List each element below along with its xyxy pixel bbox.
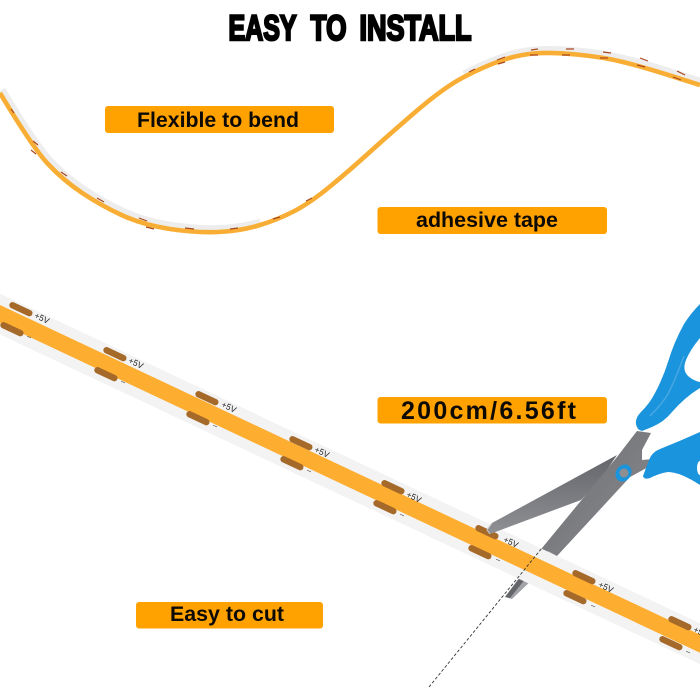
handle highlight bbox=[650, 356, 684, 416]
lower blue handle bbox=[643, 432, 700, 485]
positive voltage labels: +5V bbox=[597, 579, 615, 595]
positive voltage labels: +5V bbox=[127, 355, 145, 371]
curved LED strip bbox=[0, 49, 700, 232]
top solder pads bbox=[8, 301, 693, 631]
scissors main blade bbox=[542, 431, 653, 556]
scissors blade over strip bbox=[487, 455, 617, 534]
negative labels: − bbox=[304, 465, 314, 477]
upper blue handle bbox=[636, 304, 700, 431]
title bbox=[228, 8, 472, 48]
straight LED strip bbox=[0, 301, 700, 658]
label: flexible to bend: Flexible to bend bbox=[137, 108, 299, 132]
title: TO bbox=[310, 8, 346, 48]
positive voltage labels: +5V bbox=[33, 310, 51, 326]
negative labels bbox=[24, 331, 693, 658]
handle opening bbox=[697, 461, 700, 475]
title: EASY bbox=[228, 8, 297, 48]
negative labels: − bbox=[588, 600, 598, 612]
positive voltage labels: +5V bbox=[220, 399, 238, 415]
positive voltage labels bbox=[33, 310, 700, 640]
positive voltage labels: +5V bbox=[405, 489, 423, 505]
label: adhesive tape bbox=[378, 207, 607, 234]
label: length: 200cm/6.56ft bbox=[401, 397, 577, 425]
bottom solder pads bbox=[0, 321, 684, 651]
label: flexible to bend bbox=[105, 106, 334, 133]
negative labels: − bbox=[397, 509, 407, 521]
dashed cut line bbox=[429, 548, 542, 687]
scissors pivot bbox=[612, 461, 635, 485]
scissors upper part bbox=[487, 304, 700, 556]
title: INSTALL bbox=[360, 8, 472, 48]
positive voltage labels: +5V bbox=[313, 444, 331, 460]
label: adhesive tape: adhesive tape bbox=[416, 208, 558, 232]
negative labels: − bbox=[118, 376, 128, 388]
label: easy to cut bbox=[136, 602, 323, 628]
scissors lower blade tip behind strip bbox=[505, 548, 557, 599]
negative labels: − bbox=[210, 420, 220, 432]
label: easy to cut: Easy to cut bbox=[170, 602, 284, 626]
negative labels: − bbox=[493, 554, 503, 566]
negative labels: − bbox=[683, 646, 693, 658]
positive voltage labels: +5V bbox=[502, 534, 520, 550]
negative labels: − bbox=[24, 331, 34, 343]
